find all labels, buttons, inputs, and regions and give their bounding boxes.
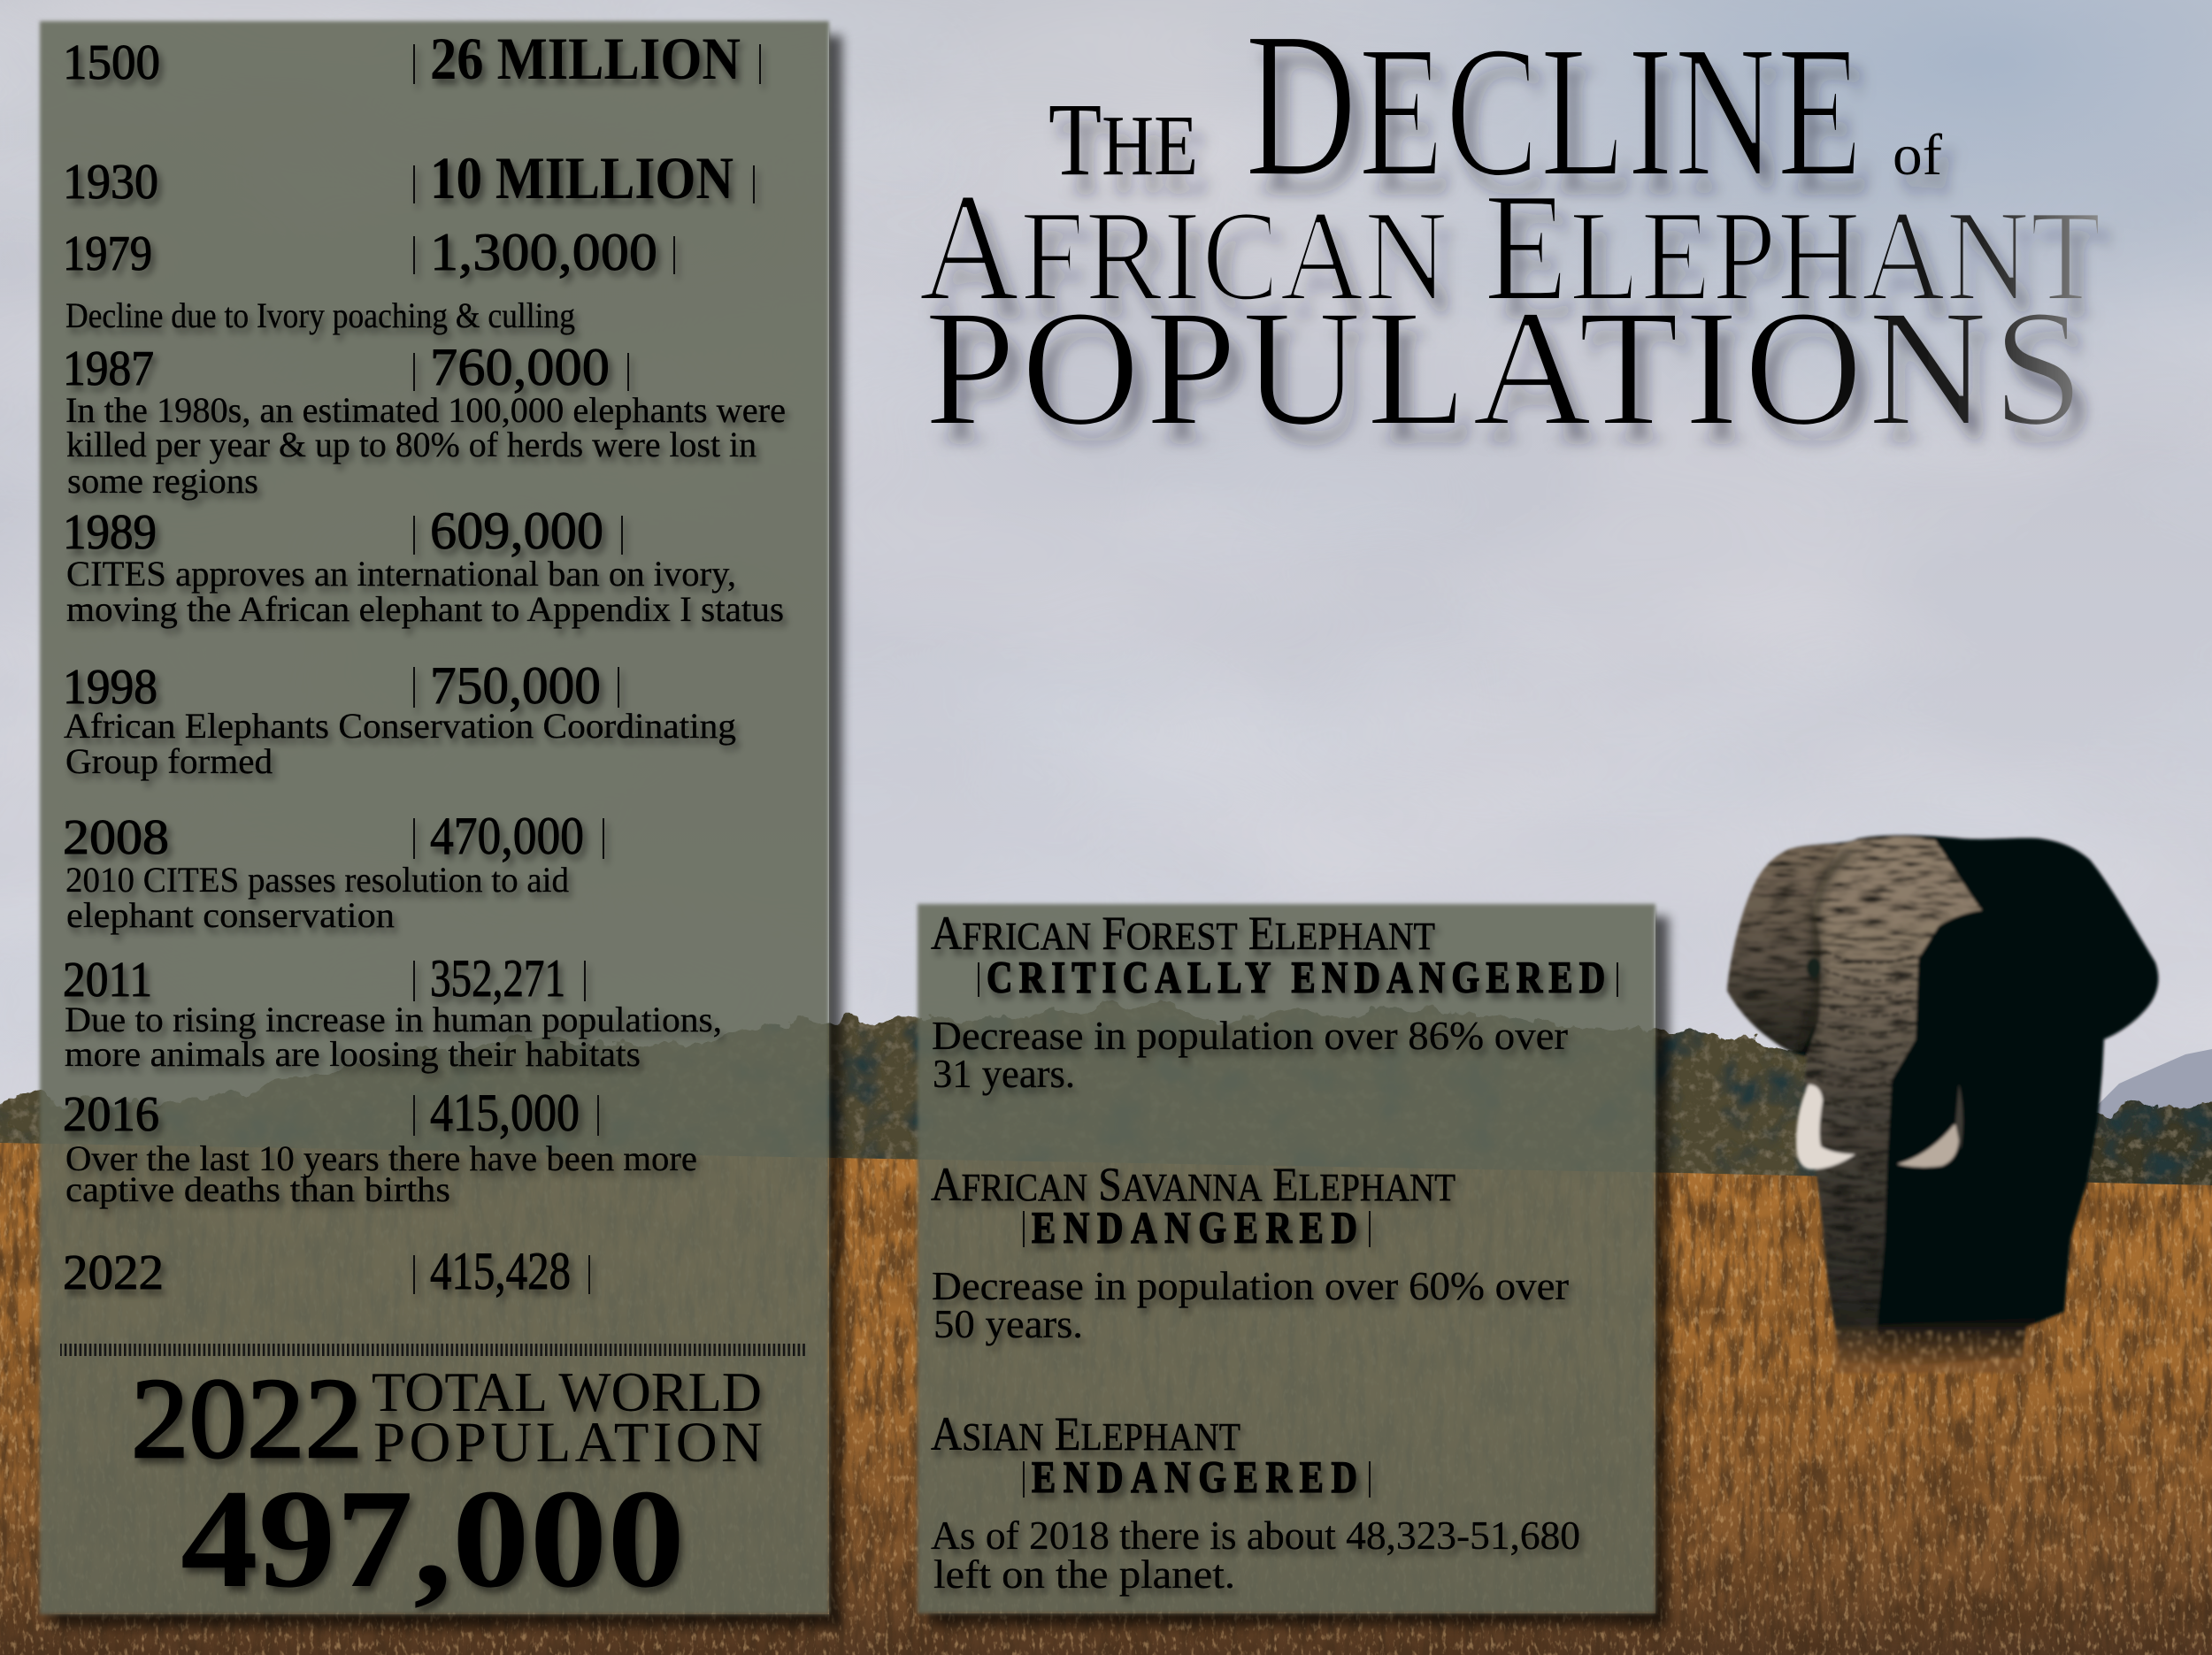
African savanna elephant [931, 1158, 1569, 1346]
grass field [0, 1141, 2212, 1655]
title line 3: POPULATIONS [924, 275, 2085, 460]
row 1987: killed per year & up to 80% of herds were lost in [66, 425, 757, 464]
row 1987: In the 1980s, an estimated 100,000 elephants were [65, 390, 786, 430]
row 2016: 2016 [63, 1087, 159, 1142]
row 2011: Due to rising increase in human populations, [65, 1000, 722, 1039]
total world population callout: 2022 [131, 1355, 363, 1483]
row 1989: 609,000 [430, 502, 603, 560]
row 1930: 1930 [63, 155, 158, 210]
left tusk [1796, 1084, 1855, 1169]
row 1998: Group formed [65, 741, 273, 781]
African savanna elephant: AFRICAN SAVANNA ELEPHANT [931, 1158, 1455, 1211]
title line 1: THE [1048, 81, 1198, 197]
distant mountain [2097, 1049, 2212, 1123]
row 2011: 2011 [63, 953, 152, 1008]
row 1987: some regions [67, 461, 258, 501]
row 2022 [63, 1242, 590, 1300]
row 2022: 2022 [63, 1245, 164, 1300]
elephant body silhouette [1727, 835, 2158, 1365]
total world population callout [131, 1355, 763, 1617]
title line 2: AFRICAN ELEPHANT [918, 161, 2101, 333]
row 1979 [63, 223, 675, 335]
row 1500 [63, 25, 761, 92]
total world population callout: POPULATION [373, 1411, 763, 1475]
row 1998: African Elephants Conservation Coordinating [64, 706, 736, 746]
row 2008: 470,000 [430, 807, 584, 865]
panel: population timeline [40, 21, 842, 1628]
panel shadow [931, 916, 1669, 1626]
Asian elephant: As of 2018 there is about 48,323-51,680 [931, 1513, 1580, 1558]
row 2011: more animals are loosing their habitats [65, 1034, 641, 1074]
row 2008: elephant conservation [66, 895, 395, 935]
row 2016: captive deaths than births [65, 1169, 450, 1209]
panel background [40, 21, 829, 1614]
tree line [0, 1007, 2212, 1194]
row 2022: 415,428 [430, 1242, 571, 1300]
row 1987: 760,000 [430, 338, 610, 396]
panel: species status [918, 904, 1669, 1626]
African forest elephant: CRITICALLY ENDANGERED [987, 953, 1605, 1002]
eye [1807, 958, 1821, 977]
ear crease [1805, 851, 1851, 1049]
right tusk [1897, 1124, 1959, 1168]
row 1979: 1,300,000 [430, 223, 657, 281]
ticked divider [60, 1344, 806, 1356]
African forest elephant: Decrease in population over 86% over [932, 1013, 1568, 1058]
timeline entries [63, 25, 786, 1300]
row 1979: Decline due to Ivory poaching & culling [65, 295, 575, 335]
row 1989 [63, 502, 784, 629]
row 2016: Over the last 10 years there have been more [65, 1138, 697, 1178]
row 1930 [63, 144, 755, 211]
title line 1: of [1893, 123, 1942, 188]
Asian elephant: ENDANGERED [1032, 1452, 1357, 1502]
sky [0, 0, 2212, 1203]
African savanna elephant: 50 years. [933, 1301, 1083, 1346]
row 1998 [63, 656, 736, 781]
row 1998: 1998 [63, 660, 157, 715]
row 2016 [63, 1084, 697, 1209]
row 1998: 750,000 [430, 656, 601, 715]
African savanna elephant: Decrease in population over 60% over [932, 1263, 1569, 1308]
row 2008: 2008 [63, 810, 169, 865]
Asian elephant: ASIAN ELEPHANT [931, 1407, 1240, 1460]
African savanna elephant: ENDANGERED [1032, 1203, 1357, 1253]
row 1989: CITES approves an international ban on ivory, [66, 554, 736, 594]
row 2011: 352,271 [430, 949, 565, 1008]
row 2008 [63, 807, 604, 935]
African forest elephant: AFRICAN FOREST ELEPHANT [931, 907, 1435, 960]
row 1979: 1979 [63, 226, 152, 281]
row 1500: 1500 [63, 35, 160, 90]
total world population callout: TOTAL WORLD [372, 1360, 762, 1423]
trunk wrinkles [1807, 951, 1916, 1261]
left ear [1727, 845, 1849, 1051]
elephant photo subject [1727, 835, 2158, 1373]
African forest elephant: 31 years. [933, 1051, 1075, 1096]
row 2011 [63, 949, 722, 1074]
total world population callout: 497,000 [180, 1460, 685, 1617]
row 1987 [63, 338, 786, 501]
forehead and trunk [1805, 837, 1982, 1362]
row 1500: 26 MILLION [430, 25, 741, 92]
panel shadow [53, 35, 842, 1628]
African forest elephant [931, 907, 1618, 1096]
row 1989: 1989 [63, 505, 157, 560]
row 1987: 1987 [63, 341, 154, 396]
title [918, 0, 2101, 460]
species text [931, 907, 1618, 1597]
row 1989: moving the African elephant to Appendix I status [66, 589, 784, 629]
row 1930: 10 MILLION [430, 144, 733, 211]
panel background [918, 904, 1655, 1613]
row 2016: 415,000 [430, 1084, 580, 1142]
Asian elephant [931, 1407, 1580, 1597]
Asian elephant: left on the planet. [933, 1552, 1235, 1597]
grass in front of feet [1832, 1318, 2035, 1373]
row 2008: 2010 CITES passes resolution to aid [65, 860, 569, 900]
